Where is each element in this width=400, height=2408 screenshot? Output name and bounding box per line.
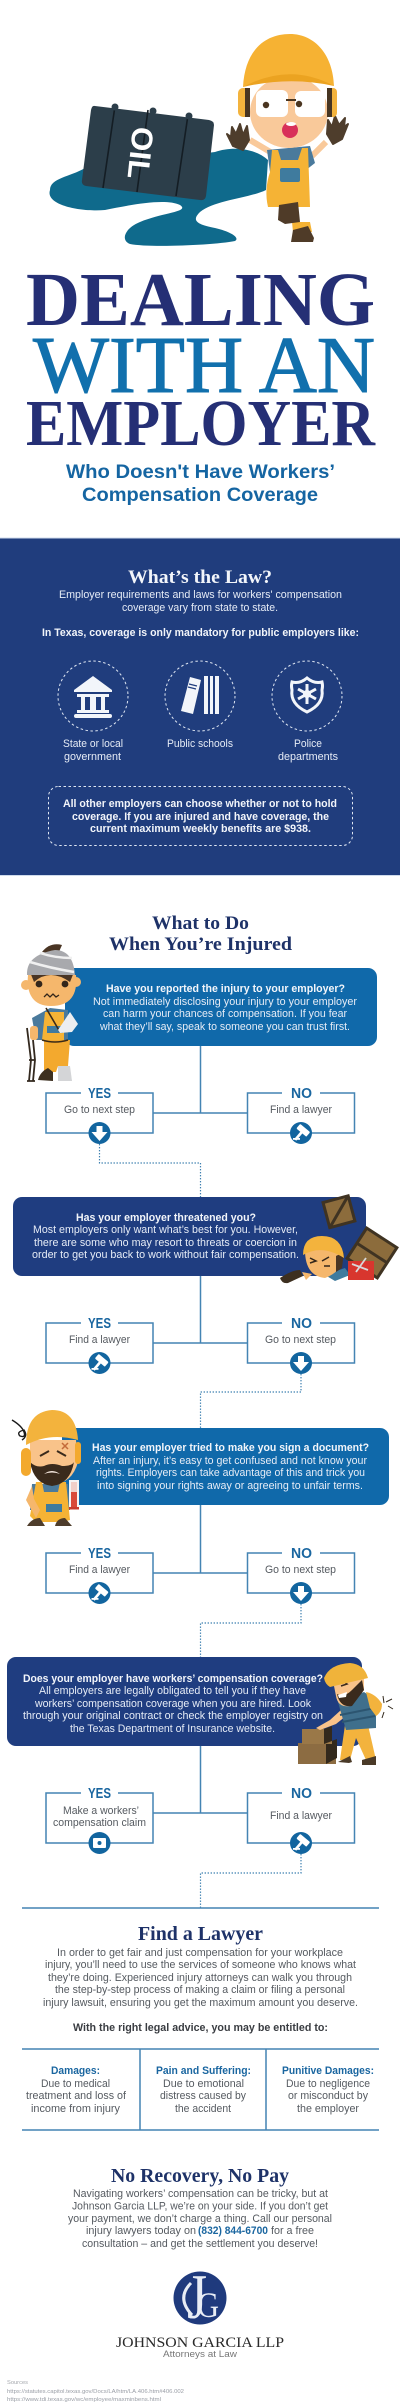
no recovery body text: consultation – and get the settlement you deserve! [82, 2238, 318, 2250]
step 1 question box: can harm your chances of compensation. If you fear [103, 1008, 347, 1020]
character: worker with back pain and boxes [298, 1663, 393, 1765]
callout: other employers [48, 786, 352, 846]
step 3 no box [248, 1546, 354, 1604]
sources: https://www.tdi.texas.gov/wc/employee/maxminbens.html [7, 2397, 161, 2403]
find a lawyer body text: injury, you’ll need to use the services of someone who knows what [45, 1959, 356, 1971]
logo: Johnson Garcia LLP [116, 2261, 284, 2359]
column: damages: Damages: [51, 2065, 100, 2077]
step 1 question box [65, 968, 377, 1046]
step 4 yes box: YES [88, 1786, 111, 1802]
oil barrel: OIL [121, 125, 159, 180]
icon labels: departments [278, 751, 338, 763]
step 2 no box: NO [291, 1316, 312, 1332]
subtitle: Who Doesn't Have Workers’ [66, 461, 335, 483]
step 3 yes box: Find a lawyer [69, 1564, 130, 1576]
logo: Johnson Garcia LLP: G [197, 2285, 219, 2325]
law intro text [42, 589, 359, 639]
step 3 yes box [46, 1546, 153, 1604]
step 3 flow [12, 1410, 389, 1657]
step 3 no box: Go to next step [265, 1564, 336, 1576]
logo: Johnson Garcia LLP: J [187, 2261, 207, 2332]
no recovery body text: your payment, we don’t charge a thing. Call our personal [68, 2213, 332, 2225]
law intro text: coverage vary from state to state. [122, 602, 278, 614]
icon: folder [88, 1832, 110, 1854]
step 4 question box: All employers are legally obligated to tell you if they have [39, 1685, 306, 1697]
step 4 flow [7, 1657, 393, 1908]
step 4 question box: the Texas Department of Insurance website. [70, 1723, 275, 1735]
no recovery body text: (832) 844-6700 [198, 2225, 268, 2237]
title [26, 258, 376, 460]
law intro text: Employer requirements and laws for workers' compensation [59, 589, 342, 601]
step 3 yes box: YES [88, 1546, 111, 1562]
step 1 no box: NO [291, 1086, 312, 1102]
law heading: What’s the Law? [128, 567, 272, 588]
no recovery body text: injury lawyers today on [86, 2225, 196, 2237]
step 3 question box: Has your employer tried to make you sign a document? [92, 1442, 369, 1454]
icon labels: Public schools [167, 738, 233, 750]
step 2 question box: order to get you back to work without fair compensation. [32, 1249, 299, 1261]
heading: what to do: What to Do [152, 913, 249, 934]
step 2 yes box [46, 1316, 153, 1374]
dotted link to step 3 [200, 1374, 301, 1428]
step 1 yes box: YES [88, 1086, 111, 1102]
column: damages: income from injury [31, 2103, 120, 2115]
no recovery body text [68, 2188, 332, 2250]
step 1 question box: what they’ll say, speak to someone you can trust first. [99, 1021, 350, 1033]
step 2 no box [248, 1316, 354, 1374]
column: damages: Due to medical [41, 2078, 110, 2090]
step 1 no box [248, 1086, 354, 1144]
icon labels: State or local [63, 738, 123, 750]
column: pain and suffering: the accident [175, 2103, 231, 2115]
step 1 no box: Find a lawyer [270, 1104, 332, 1116]
law intro text: In Texas, coverage is only mandatory for public employers like: [42, 627, 359, 639]
icon labels [63, 738, 338, 763]
step 4 yes box: compensation claim [53, 1817, 146, 1829]
step 1 question box: Not immediately disclosing your injury to your employer [93, 996, 357, 1008]
hero illustration: oil spill and worker [50, 34, 348, 246]
step 1 question box: Have you reported the injury to your employer? [106, 983, 345, 995]
column: damages: treatment and loss of [26, 2090, 127, 2102]
step 2 flow [13, 1196, 397, 1428]
oil puddle [50, 149, 268, 246]
column: punitive damages [282, 2065, 374, 2115]
column: pain and suffering [156, 2065, 251, 2115]
heading: find a lawyer: Find a Lawyer [138, 1923, 263, 1945]
heading: what to do: When You’re Injured [109, 934, 292, 955]
callout: other employers: coverage. If you are injured and have coverage, the [72, 811, 329, 823]
title: DEALING [26, 258, 375, 342]
step 2 question box [13, 1197, 366, 1276]
step 4 connector [153, 1746, 247, 1813]
sources: https://statutes.capitol.texas.gov/Docs/LA/htm/LA.406.htm#406.002 [7, 2389, 184, 2395]
no recovery body text: for a free [271, 2225, 314, 2237]
find a lawyer body text: the step-by-step process of making a claim or filing a personal [55, 1984, 345, 1996]
dotted link to step 4 [200, 1604, 301, 1657]
step 3 question box: rights. Employers can take advantage of this and trick you [96, 1467, 365, 1479]
step 4 question box [7, 1657, 362, 1746]
step 3 question box: into signing your rights away or agreeing to unfair terms. [97, 1480, 363, 1492]
step 4 no box [248, 1786, 354, 1854]
no recovery body text: Johnson Garcia LLP, we’re on your side. If you don’t get [72, 2200, 328, 2212]
dotted link to find a lawyer [200, 1854, 301, 1908]
icon labels: Police [294, 738, 322, 750]
worker [227, 34, 348, 242]
logo: Johnson Garcia LLP: JOHNSON GARCIA LLP [116, 2335, 284, 2351]
column: damages [26, 2065, 127, 2115]
panel: what's the law [0, 538, 400, 876]
logo: Johnson Garcia LLP: Attorneys at Law [163, 2349, 238, 2359]
step 2 connector [153, 1276, 247, 1343]
find a lawyer body text: In order to get fair and just compensation for your workplace [57, 1947, 343, 1959]
step 2 yes box: Find a lawyer [69, 1334, 130, 1346]
column: pain and suffering: Pain and Suffering: [156, 2065, 251, 2077]
step 4 question box: Does your employer have workers’ compensation coverage? [23, 1673, 323, 1685]
find a lawyer body text [43, 1947, 358, 2009]
step 2 no box: Go to next step [265, 1334, 336, 1346]
step 4 yes box: Make a workers’ [63, 1805, 139, 1817]
divider and section: find a lawyer [22, 1908, 379, 2034]
step 3 no box: NO [291, 1546, 312, 1562]
step 4 yes box [46, 1786, 153, 1854]
heading: no recovery: No Recovery, No Pay [111, 2165, 289, 2187]
column: pain and suffering: Due to emotional [163, 2078, 244, 2090]
no recovery body text: Navigating workers’ compensation can be tricky, but at [73, 2188, 328, 2200]
step 3 connector [153, 1505, 247, 1573]
column: punitive damages: Due to negligence [286, 2078, 370, 2090]
find a lawyer body text: injury lawsuit, ensuring you get the maximum amount you deserve. [43, 1997, 358, 2009]
step 2 question box: there are some who may resort to threats or coercion in [34, 1237, 297, 1249]
icon: books [165, 661, 235, 731]
step 1 flow [21, 944, 377, 1198]
find a lawyer body text: they’re doing. Experienced injury attorneys can walk you through [48, 1972, 352, 1984]
step 2 yes box: YES [88, 1316, 111, 1332]
icon: police badge [272, 661, 342, 731]
step 4 no box: NO [291, 1786, 312, 1802]
section: no recovery no pay [68, 2165, 332, 2250]
step 4 question box: through your original contract or check the employer registry on [23, 1710, 323, 1722]
sources [7, 2380, 184, 2403]
subtitle: Compensation Coverage [82, 484, 318, 506]
step 1 yes box: Go to next step [64, 1104, 135, 1116]
step 3 question box [62, 1428, 389, 1505]
step 1 connector [153, 1046, 247, 1113]
character: injured worker on crutch [21, 944, 81, 1081]
step 1 yes box [46, 1086, 153, 1144]
column: pain and suffering: distress caused by [160, 2090, 246, 2102]
dotted link to step 2 [100, 1144, 200, 1198]
step 2 question box: Has your employer threatened you? [76, 1212, 256, 1224]
column: punitive damages: Punitive Damages: [282, 2065, 374, 2077]
icon: government building [58, 661, 128, 731]
title: WITH AN [33, 320, 375, 410]
character: worker under crates [280, 1196, 397, 1283]
column: punitive damages: or misconduct by [288, 2090, 368, 2102]
entitled heading: With the right legal advice, you may be entitled to: [73, 2022, 328, 2034]
step 3 question box: After an injury, it’s easy to get confused and not know your [93, 1455, 367, 1467]
callout: other employers: current maximum weekly benefits are $938. [90, 823, 311, 835]
callout: other employers: All other employers can choose whether or not to hold [63, 798, 337, 810]
oil barrel [82, 104, 214, 200]
sources: Sources [7, 2380, 29, 2386]
damages table [22, 2049, 379, 2130]
heading: what to do [109, 913, 292, 955]
icon labels: government [64, 751, 121, 763]
step 4 question box: workers’ compensation coverage when you are hired. Look [34, 1698, 311, 1710]
step 4 no box: Find a lawyer [270, 1810, 332, 1822]
column: punitive damages: the employer [297, 2103, 359, 2115]
character: dazed worker with beard [12, 1410, 81, 1526]
step 2 question box: Most employers only want what’s best for you. However, [33, 1224, 298, 1236]
subtitle [66, 461, 335, 506]
title: EMPLOYER [26, 387, 376, 460]
